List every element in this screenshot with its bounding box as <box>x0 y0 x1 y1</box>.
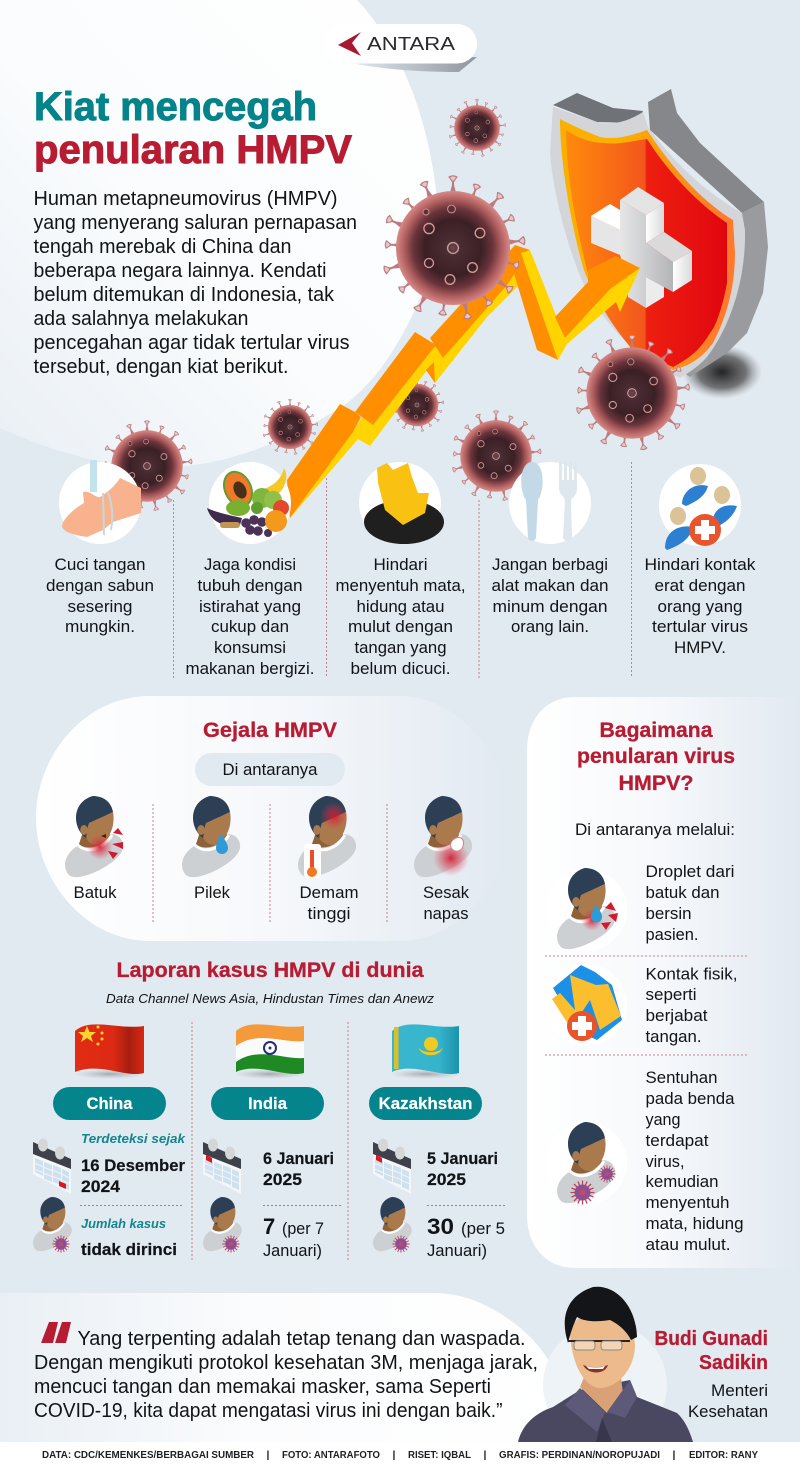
icon: calendar Kazakhstan <box>373 1138 411 1194</box>
symptom: high fever <box>298 796 358 923</box>
virus: large central <box>382 175 526 320</box>
shield cross <box>591 187 692 308</box>
symptom: cough: Batuk <box>74 883 117 902</box>
transmission heading: HMPV? <box>618 772 694 795</box>
icon: calendar India <box>203 1138 241 1194</box>
tip text: body condition: istirahat yang <box>199 597 301 616</box>
footer credits <box>0 1442 800 1467</box>
intro paragraph: tersebut, dengan kiat berikut. <box>34 356 288 378</box>
title: penularan HMPV <box>34 128 352 172</box>
symptoms sub-label pill: Di antaranya <box>222 761 318 779</box>
quote text: Yang terpenting adalah tetap tenang dan waspada. <box>78 1328 526 1350</box>
person name and role: Kesehatan <box>688 1402 768 1421</box>
case report heading: Laporan kasus HMPV di dunia <box>116 959 424 982</box>
transmission icon: contaminated surface <box>545 1122 627 1204</box>
transmission heading <box>577 719 735 795</box>
tip text: do not touch face: belum dicuci. <box>350 659 450 678</box>
tip icon: people with medical sign <box>659 464 741 550</box>
symptom: runny nose <box>182 796 240 902</box>
China report: 16 Desember <box>81 1156 185 1175</box>
country label: China <box>53 1087 166 1120</box>
flag: Kazakhstan <box>390 1024 462 1079</box>
tip text: cutlery: orang lain. <box>511 617 589 636</box>
China report: tidak dirinci <box>81 1240 177 1259</box>
footer credits: DATA: CDC/KEMENKES/BERBAGAI SUMBER <box>42 1449 254 1461</box>
icon: calendar China <box>33 1138 71 1194</box>
footer credits: GRAFIS: PERDINAN/NOROPUJADI <box>499 1449 660 1461</box>
transmission icon: handshake <box>545 964 627 1046</box>
icon: patient China <box>33 1197 72 1253</box>
transmission intro: Di antaranya melalui: <box>575 820 735 839</box>
tip text: avoid contact: HMPV. <box>674 638 726 657</box>
person name and role: Budi Gunadi <box>654 1328 768 1350</box>
transmission text: droplet: Droplet dari <box>646 862 734 881</box>
icon: patient Kazakhstan <box>373 1197 412 1253</box>
tip icon: washing hands <box>59 460 141 544</box>
intro paragraph: ada salahnya melakukan <box>34 308 248 330</box>
tip text: body condition: konsumsi <box>214 638 286 657</box>
tip text: wash hands <box>46 555 154 636</box>
transmission text: touching objects: yang <box>646 1110 680 1129</box>
quote text: Dengan mengikuti protokol kesehatan 3M, menjaga jarak, <box>34 1352 538 1374</box>
tip text: wash hands: Cuci tangan <box>54 555 146 574</box>
Kazakhstan report: 30 <box>427 1214 454 1239</box>
tip text: body condition: Jaga kondisi <box>204 555 296 574</box>
title <box>34 85 352 172</box>
intro paragraph: beberapa negara lainnya. Kendati <box>34 260 326 282</box>
logo: ANTARA <box>367 34 455 54</box>
Kazakhstan report: 5 Januari <box>427 1149 498 1168</box>
tip text: do not touch face: mulut dengan <box>348 617 453 636</box>
tip text: wash hands: sesering <box>68 597 132 616</box>
intro paragraph: Human metapneumovirus (HMPV) <box>34 188 338 210</box>
India report: (per 7 <box>282 1219 324 1238</box>
India report: 7 <box>263 1214 275 1239</box>
symptoms heading: Gejala HMPV <box>203 719 337 742</box>
Kazakhstan report <box>373 1138 505 1260</box>
symptom: shortness of breath <box>414 796 472 923</box>
logo <box>324 24 477 72</box>
China report: Jumlah kasus <box>81 1216 166 1231</box>
footer credits: EDITOR: RANY <box>689 1449 758 1461</box>
footer credits: | <box>266 1449 270 1461</box>
portrait: Budi Gunadi Sadikin <box>518 1287 693 1442</box>
flag: China <box>74 1024 146 1079</box>
virus: upper small <box>449 99 506 157</box>
footer credits: RISET: IQBAL <box>408 1449 472 1461</box>
virus: behind arrow <box>391 378 444 432</box>
symptom: high fever: Demam <box>300 883 358 902</box>
shield <box>550 89 768 399</box>
symptoms sub-label pill <box>195 753 345 786</box>
Kazakhstan report: Januari) <box>427 1241 487 1260</box>
tip text: body condition: cukup dan <box>211 617 289 636</box>
tip text: avoid contact <box>644 555 756 657</box>
China report: Terdeteksi sejak <box>81 1131 186 1146</box>
tip text: body condition <box>186 555 314 678</box>
tips column separators <box>174 462 632 678</box>
quote mark <box>41 1322 71 1343</box>
country label: India <box>211 1087 324 1120</box>
footer credits: | <box>484 1449 486 1461</box>
transmission text: droplet: bersin <box>646 904 692 923</box>
transmission text: touching objects: virus, <box>646 1152 684 1171</box>
tip text: do not touch face: tangan yang <box>354 638 446 657</box>
virus: lower right <box>575 335 690 451</box>
India report: 6 Januari <box>263 1149 334 1168</box>
tip icon: shield on black base <box>359 462 444 544</box>
virus: near hand icon <box>103 420 193 511</box>
intro paragraph: pencegahan agar tidak tertular virus <box>34 332 350 354</box>
Kazakhstan report: (per 5 <box>461 1219 505 1238</box>
tip icon: fruit <box>207 462 291 544</box>
virus: near cutlery icon <box>452 410 542 501</box>
country label: Kazakhstan <box>369 1087 482 1120</box>
Kazakhstan report: 2025 <box>427 1170 466 1189</box>
symptom: cough <box>65 796 123 902</box>
transmission text: touching objects: mata, hidung <box>646 1214 744 1233</box>
transmission text: touching objects: terdapat <box>646 1131 709 1150</box>
country label: India: India <box>248 1094 288 1113</box>
intro paragraph <box>34 188 357 378</box>
transmission text: contact <box>646 964 738 1046</box>
panel: transmission <box>527 697 800 1268</box>
tip text: do not touch face <box>336 555 466 678</box>
footer credits: | <box>672 1449 676 1461</box>
tip text: avoid contact: erat dengan <box>654 576 746 595</box>
transmission text: contact: berjabat <box>646 1006 708 1025</box>
China report: 2024 <box>81 1177 121 1196</box>
quote text <box>34 1328 538 1422</box>
transmission text: touching objects: Sentuhan <box>646 1068 718 1087</box>
symptom: runny nose: Pilek <box>194 883 230 902</box>
tip text: wash hands: dengan sabun <box>46 576 154 595</box>
intro paragraph: yang menyerang saluran pernapasan <box>34 212 357 234</box>
icon: patient India <box>203 1197 242 1253</box>
person name and role: Menteri <box>711 1381 768 1400</box>
flag: India <box>234 1024 306 1079</box>
transmission text: touching objects <box>646 1068 744 1254</box>
China report <box>33 1131 186 1259</box>
case report source: Data Channel News Asia, Hindustan Times dan Anewz <box>106 991 435 1006</box>
intro paragraph: tengah merebak di China dan <box>34 236 292 258</box>
transmission text: droplet <box>646 862 734 944</box>
title: Kiat mencegah <box>34 85 317 129</box>
country label: Kazakhstan: Kazakhstan <box>378 1094 472 1113</box>
transmission text: contact: Kontak fisik, <box>646 964 738 984</box>
country label: China: China <box>86 1094 133 1113</box>
transmission heading: penularan virus <box>577 745 735 768</box>
transmission text: touching objects: kemudian <box>646 1172 718 1191</box>
symptom: shortness of breath: napas <box>424 904 468 923</box>
footer credits: FOTO: ANTARAFOTO <box>282 1449 380 1461</box>
transmission text: touching objects: pada benda <box>646 1089 735 1108</box>
tip text: body condition: tubuh dengan <box>198 576 302 595</box>
tip text: do not touch face: Hindari <box>374 555 428 574</box>
India report <box>203 1138 342 1260</box>
virus: centre left <box>263 399 318 455</box>
person name and role: Sadikin <box>699 1352 768 1374</box>
tip text: cutlery: Jangan berbagi <box>492 555 608 574</box>
transmission heading: Bagaimana <box>600 719 713 742</box>
quote panel background <box>0 1293 667 1447</box>
quote text: COVID-19, kita dapat mengatasi virus ini dengan baik.” <box>34 1400 502 1422</box>
person name and role <box>654 1328 768 1421</box>
rising zigzag arrow <box>287 245 640 518</box>
quote text: mencuci tangan dan memakai masker, sama Seperti <box>34 1376 491 1398</box>
transmission text: droplet: batuk dan <box>646 883 720 902</box>
tip text: cutlery <box>492 555 608 636</box>
top white background shape <box>0 0 438 468</box>
transmission text: touching objects: atau mulut. <box>646 1235 730 1254</box>
transmission text: contact: tangan. <box>646 1027 702 1046</box>
tip icon: spoon and fork <box>509 462 591 544</box>
symptom: high fever: tinggi <box>308 904 350 923</box>
India report: Januari) <box>263 1241 322 1260</box>
tip text: avoid contact: orang yang <box>658 597 742 616</box>
tip text: wash hands: mungkin. <box>65 617 135 636</box>
tip text: cutlery: minum dengan <box>492 597 608 616</box>
transmission text: contact: seperti <box>646 985 696 1004</box>
tip text: avoid contact: Hindari kontak <box>644 555 756 574</box>
India report: 2025 <box>263 1170 302 1189</box>
transmission text: droplet: pasien. <box>646 925 698 944</box>
symptom: shortness of breath: Sesak <box>423 883 469 902</box>
tip text: avoid contact: tertular virus <box>652 617 748 636</box>
tip text: do not touch face: menyentuh mata, <box>336 576 466 595</box>
transmission text: touching objects: menyentuh <box>646 1193 730 1212</box>
intro paragraph: belum ditemukan di Indonesia, tak <box>34 284 335 306</box>
tip text: cutlery: alat makan dan <box>492 576 608 595</box>
tip text: body condition: makanan bergizi. <box>186 659 314 678</box>
tip text: do not touch face: hidung atau <box>356 597 444 616</box>
panel: symptoms <box>36 696 510 941</box>
transmission icon: droplet <box>545 868 627 951</box>
footer credits: | <box>392 1449 396 1461</box>
